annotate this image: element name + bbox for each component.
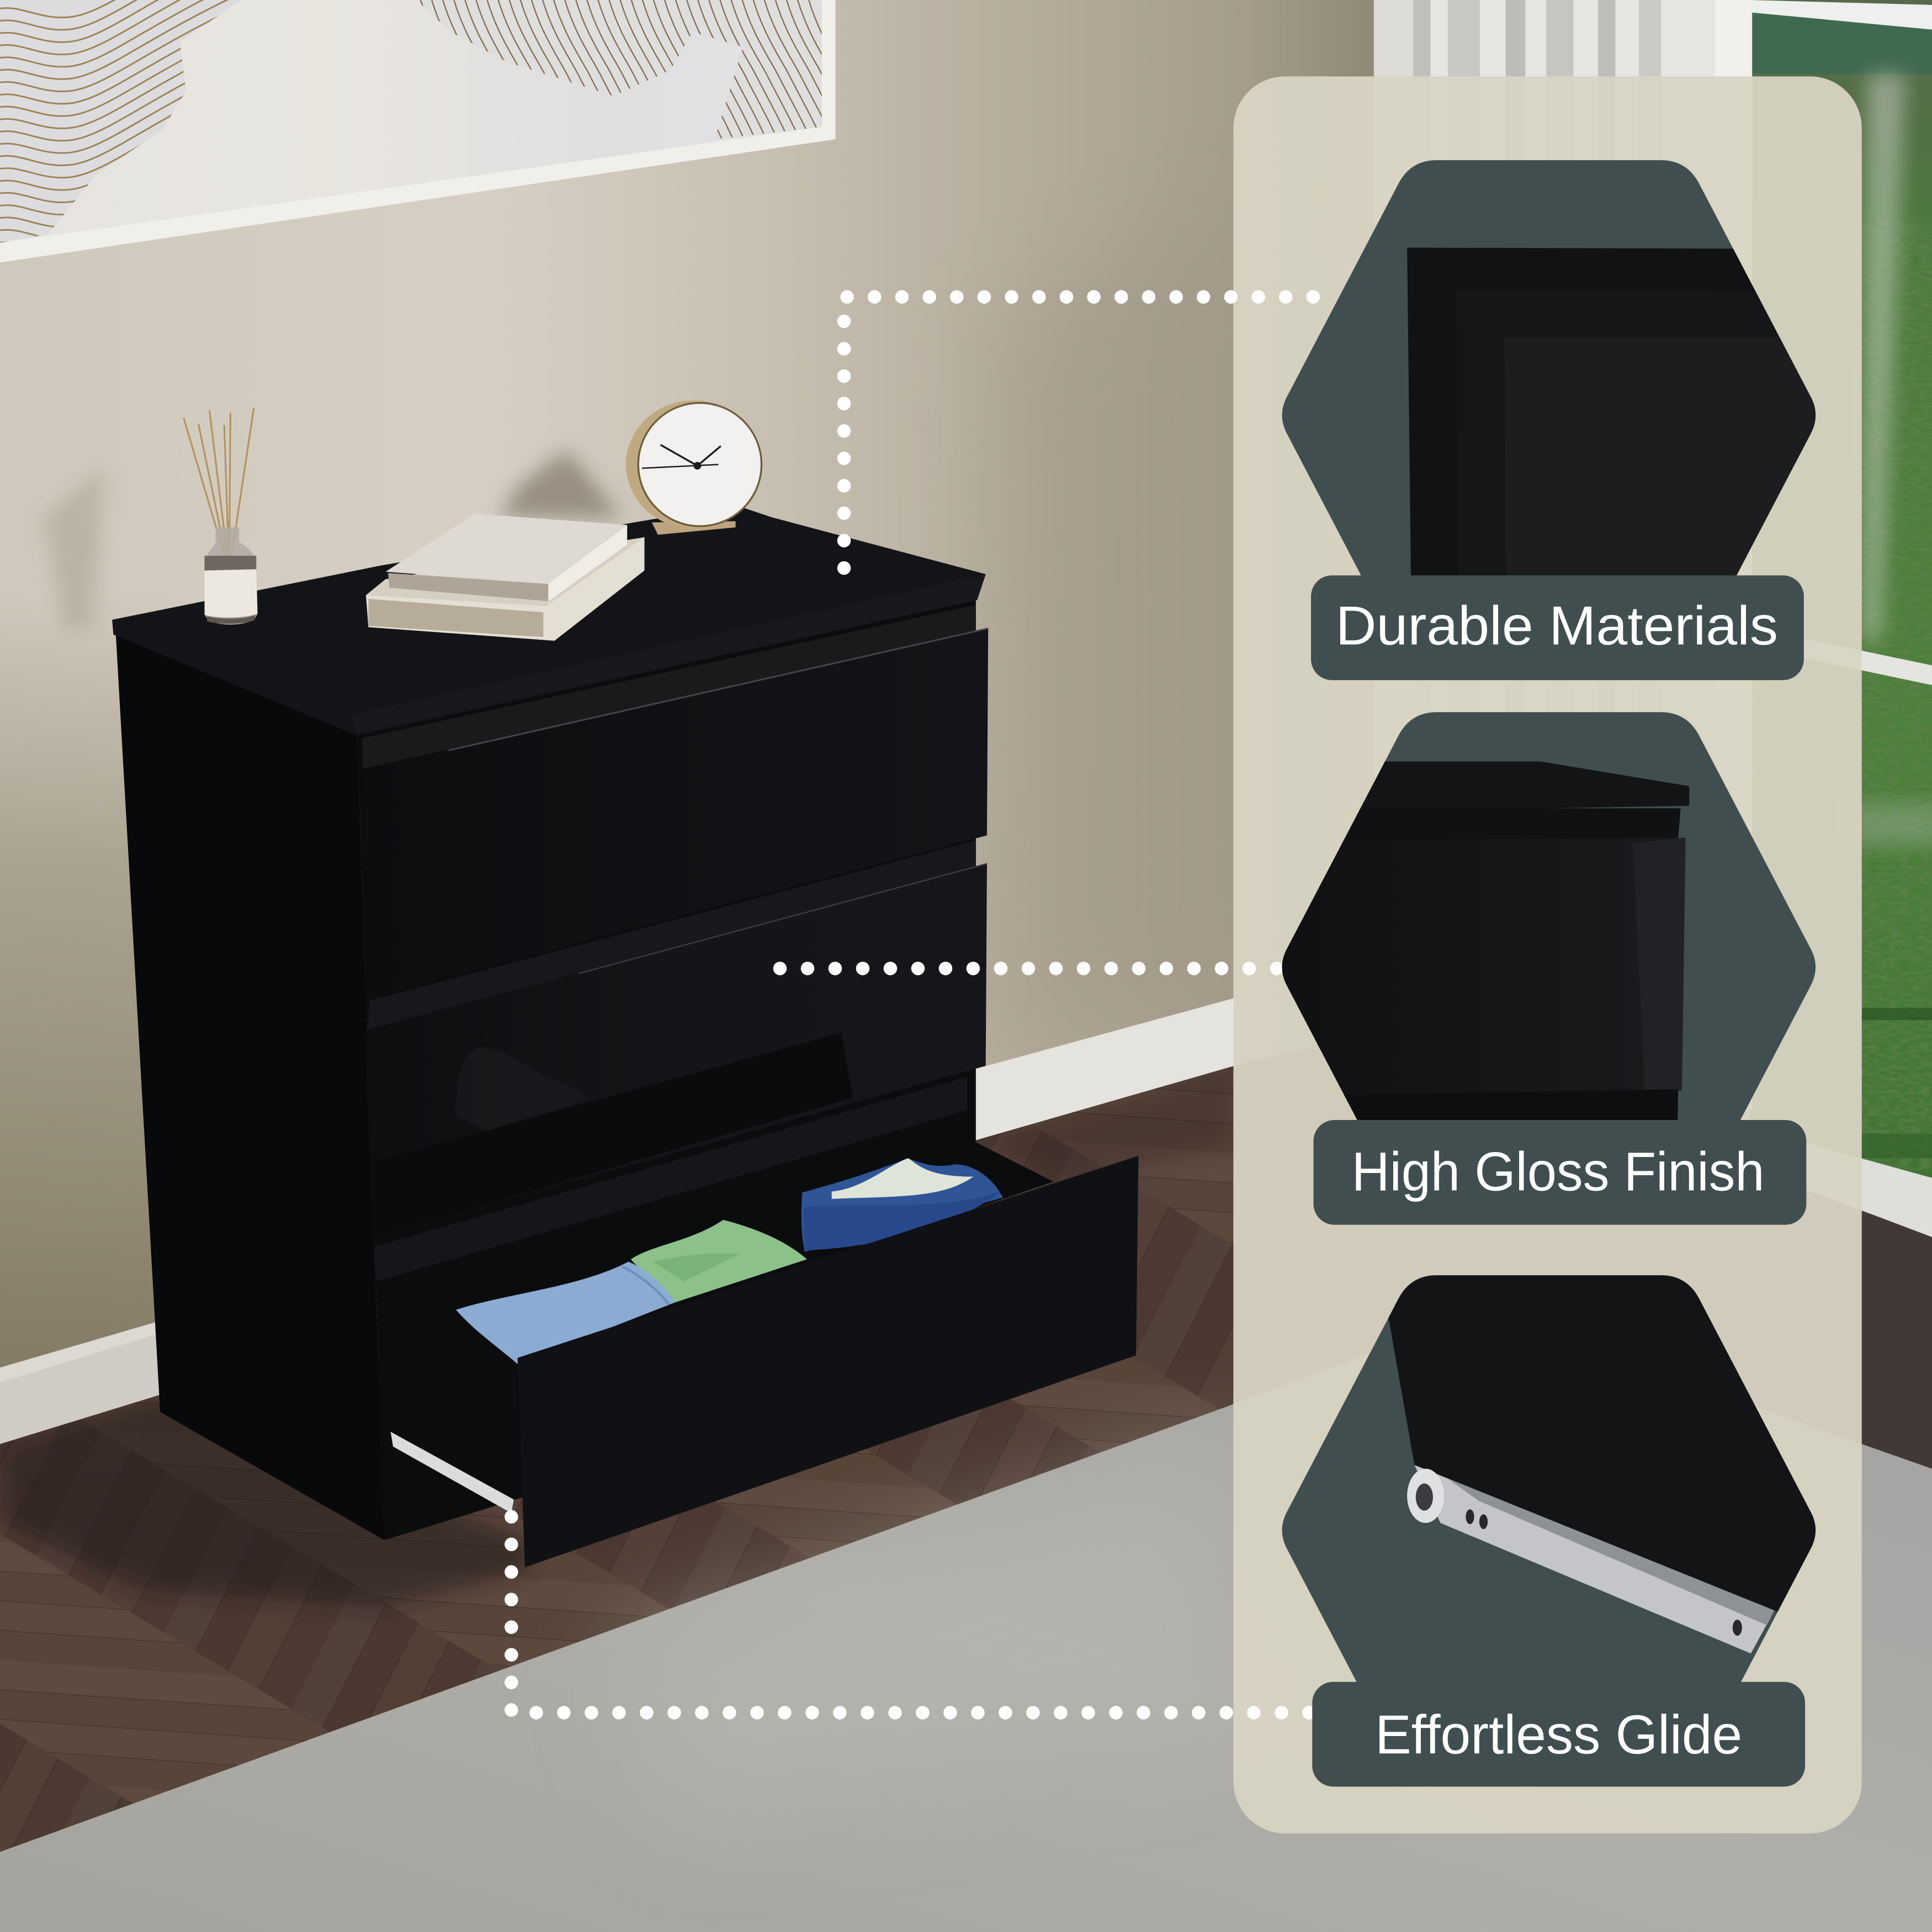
hexagon with glossy corner [1269,712,1816,1227]
blue garment [802,1158,1003,1252]
drawer front panel [518,1156,1138,1567]
cast shadow under chest [0,1395,530,1608]
label [1311,575,1804,680]
hexagon with material layers [1282,160,1824,675]
label: Durable Materials [1336,595,1778,656]
open drawer interior [376,1110,1053,1366]
baseboards [0,998,1235,1444]
chest front frame [357,600,976,1540]
feature: durable materials [1282,160,1824,680]
dotted connector: effortless glide [511,1517,1316,1713]
curtain [1374,0,1752,1109]
gap shelf [367,840,976,1030]
books [366,514,644,641]
dotted connector: durable materials [844,297,1328,568]
drawer one [362,628,988,998]
denim garment [456,1262,675,1364]
drawer two reflected garment [455,1047,586,1131]
bottle [205,527,258,625]
label: Effortless Glide [1375,1704,1742,1765]
wall shadows [0,197,1244,1380]
chest left side [116,635,384,1540]
feature panel [1233,76,1862,1833]
wall [0,0,1380,1479]
label [1313,1120,1806,1225]
hexagon with drawer runner [1282,1269,1824,1785]
drawer two reflection band [373,1033,853,1237]
diffuser [184,408,258,625]
chest of drawers [112,505,1138,1567]
feature: high gloss finish [1269,712,1816,1227]
label [1312,1682,1805,1787]
dotted connector: high gloss finish [780,965,1288,972]
clock hands [642,445,721,469]
herringbone wood floor [0,1066,1932,1852]
reeds [184,408,254,572]
drawer side [388,1306,519,1493]
green garment [631,1220,807,1302]
desk clock [626,400,761,535]
room background [0,0,1932,1479]
band beneath lip [362,605,976,769]
drawer three recess band [373,1077,967,1281]
contour lines left [0,0,241,243]
window and garden [1750,0,1932,1244]
runner wheel [1407,1469,1742,1636]
label: High Gloss Finish [1352,1141,1764,1202]
contour lines right [417,0,822,139]
feature: effortless glide [1282,1269,1824,1787]
chest top surface [112,505,986,736]
grey rug [0,1325,1932,1932]
top lip [351,574,986,733]
wall art poster [0,0,836,263]
drawer two [365,864,987,1237]
drawer slide rail [391,1432,514,1513]
